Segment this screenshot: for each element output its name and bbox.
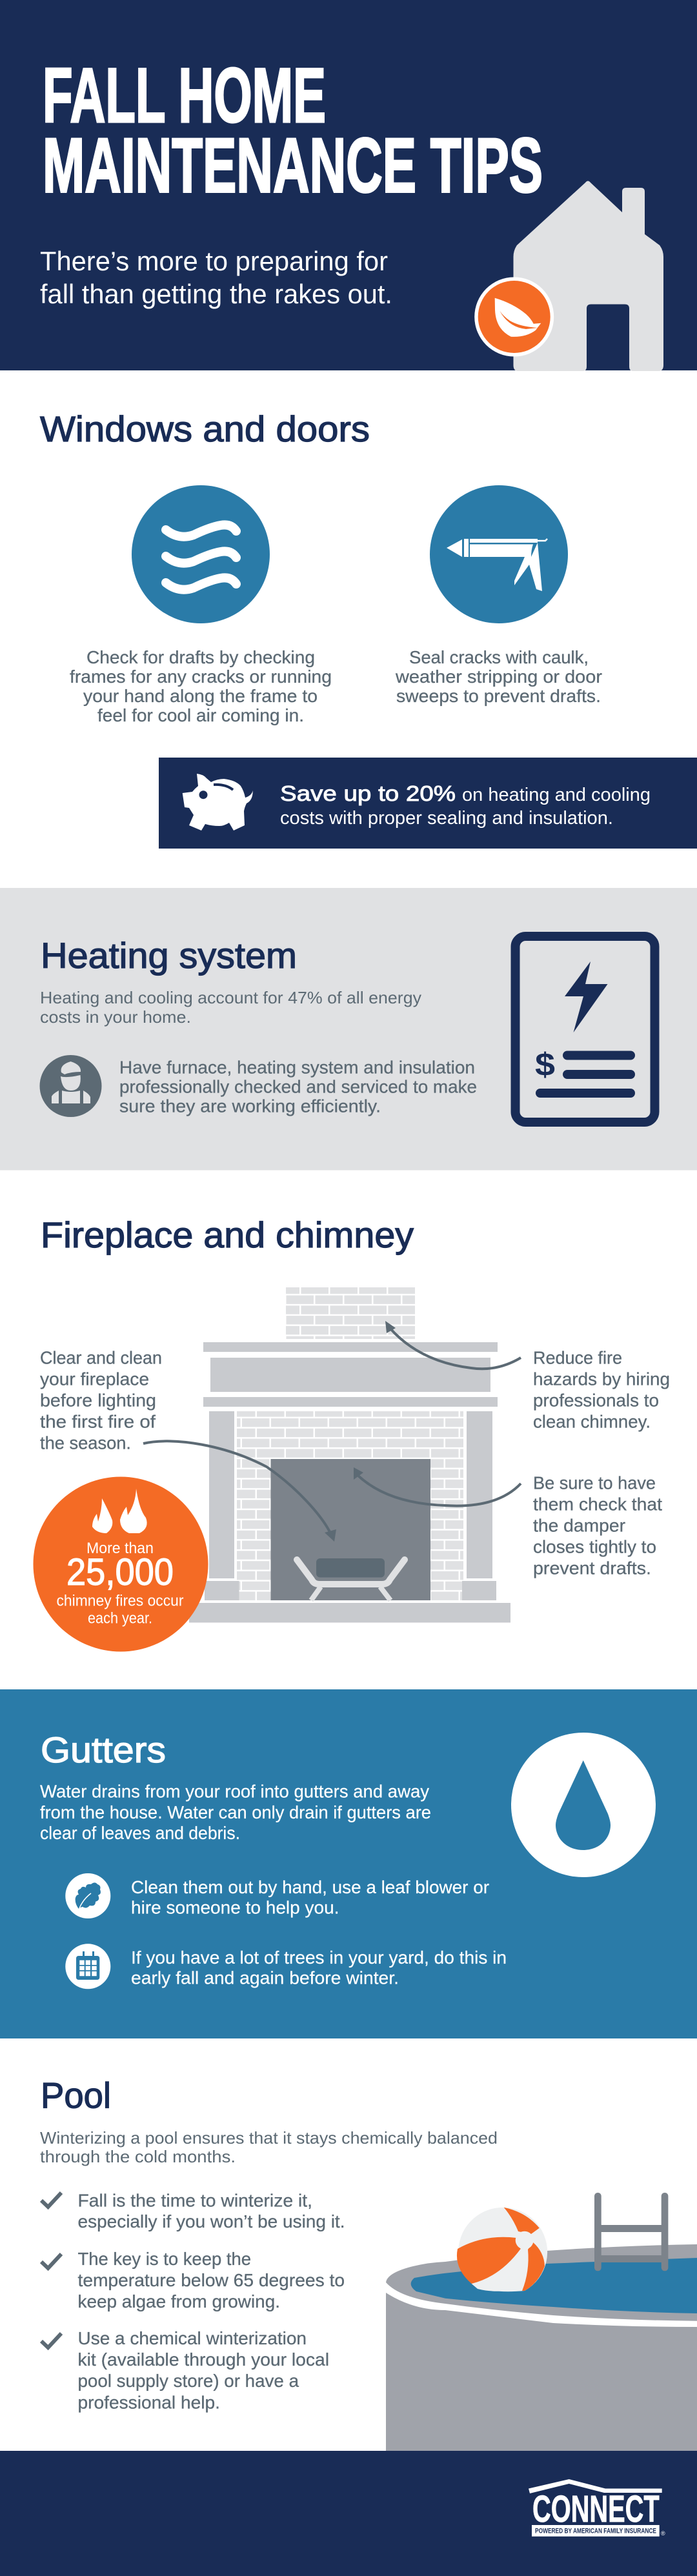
text: chemical kit: pool supply store) or have a bbox=[77, 2371, 299, 2391]
text: winterizing intro: through the cold months. bbox=[40, 2147, 236, 2166]
text: lots of trees: early fall and again before winter. bbox=[131, 1968, 399, 1987]
icon: piggy bank bbox=[183, 774, 253, 830]
icon: water drop bbox=[511, 1733, 656, 1877]
text: damper check bbox=[533, 1473, 662, 1578]
text: reduce fire hazards: Reduce fire bbox=[533, 1347, 622, 1368]
text: check for drafts: frames for any cracks or running bbox=[70, 667, 332, 687]
icon: check 2 bbox=[41, 2254, 61, 2268]
text: chemical kit bbox=[77, 2328, 329, 2412]
text: damper check: the damper bbox=[533, 1515, 625, 1536]
text: clear and clean bbox=[40, 1347, 162, 1453]
text: fall is the time: Fall is the time to winterize it, bbox=[77, 2190, 312, 2211]
icon: flames bbox=[92, 1489, 147, 1533]
subtitle: fall than getting the rakes out. bbox=[40, 279, 392, 309]
text: savings: on heating and cooling bbox=[462, 785, 651, 805]
text: clear and clean: your fireplace bbox=[40, 1369, 149, 1389]
icon: beach ball bbox=[457, 2208, 547, 2291]
text: damper check: prevent drafts. bbox=[533, 1558, 651, 1578]
text: savings: costs with proper sealing and insulation. bbox=[280, 808, 613, 829]
text: damper check: Be sure to have bbox=[533, 1473, 656, 1493]
text: more than 25,000: 25,000 bbox=[66, 1551, 174, 1593]
text: water drains bbox=[40, 1781, 431, 1843]
text: savings bbox=[280, 781, 651, 829]
text: winterizing intro: Winterizing a pool ensures that it stays chemically balanced bbox=[40, 2128, 498, 2148]
logo: connect bbox=[529, 2479, 665, 2537]
icon: energy bill bbox=[515, 936, 654, 1122]
icon: oak leaf bbox=[65, 1873, 110, 1918]
icon: ladder bbox=[594, 2193, 668, 2271]
heading: fireplace and chimney: Fireplace and chimney bbox=[41, 1214, 414, 1255]
text: keep the temperature bbox=[77, 2249, 345, 2311]
text: clean them out: hire someone to help you. bbox=[131, 1897, 339, 1918]
text: chemical kit: kit (available through your local bbox=[77, 2350, 329, 2370]
icon: technician bbox=[40, 1055, 102, 1117]
text: keep the temperature: The key is to keep the bbox=[77, 2249, 251, 2269]
text: chemical kit: professional help. bbox=[77, 2393, 220, 2412]
text: damper check: closes tightly to bbox=[533, 1537, 656, 1556]
icon: caulk gun bbox=[430, 485, 568, 623]
subtitle: There’s more to preparing for bbox=[40, 246, 388, 276]
panel: gutters bbox=[0, 1689, 697, 2038]
text: water drains: Water drains from your roof into gutters and away bbox=[40, 1781, 429, 1802]
text: seal cracks: sweeps to prevent drafts. bbox=[396, 686, 601, 706]
illustration: fireplace bbox=[189, 1287, 510, 1622]
text: check for drafts: feel for cool air coming in. bbox=[97, 705, 304, 725]
text: more than 25,000: More than bbox=[86, 1540, 154, 1557]
text: clear and clean: the first fire of bbox=[40, 1412, 156, 1431]
text: reduce fire hazards: clean chimney. bbox=[533, 1412, 651, 1431]
arrow: to chimney bbox=[385, 1321, 521, 1369]
text: check for drafts bbox=[70, 647, 332, 725]
text: clear and clean: before lighting bbox=[40, 1390, 156, 1411]
panel: pool bbox=[40, 2075, 697, 2451]
text: water drains: from the house. Water can only drain if gutters are bbox=[40, 1802, 431, 1822]
logo: connect: POWERED BY AMERICAN FAMILY INSURANCE bbox=[535, 2527, 656, 2535]
text: fall is the time: especially if you won’t be using it. bbox=[77, 2211, 345, 2231]
text: clear and clean: the season. bbox=[40, 1433, 131, 1453]
text: seal cracks: weather stripping or door bbox=[395, 667, 602, 687]
text: check for drafts: Check for drafts by checking bbox=[86, 647, 315, 667]
text: reduce fire hazards bbox=[533, 1347, 670, 1431]
arrow: to firebox bbox=[143, 1441, 336, 1542]
text: keep the temperature: keep algae from growing. bbox=[77, 2291, 280, 2311]
text: seal cracks: Seal cracks with caulk, bbox=[409, 647, 589, 667]
text: check for drafts: your hand along the frame to bbox=[83, 686, 318, 706]
text: more than 25,000: each year. bbox=[88, 1609, 152, 1627]
heading: windows and doors: Windows and doors bbox=[40, 408, 370, 449]
callout: save up to 20% bbox=[159, 758, 697, 849]
icon: house bbox=[514, 181, 663, 371]
text: clean them out bbox=[131, 1877, 489, 1918]
text: more than 25,000 bbox=[57, 1540, 183, 1627]
icon: check 1 bbox=[41, 2193, 61, 2207]
icon: air drafts bbox=[132, 485, 270, 623]
text: reduce fire hazards: professionals to bbox=[533, 1390, 659, 1411]
text: fall is the time bbox=[77, 2190, 345, 2231]
text: furnace check: sure they are working efficiently. bbox=[119, 1096, 381, 1116]
panel: footer bbox=[0, 2451, 697, 2576]
heading: gutters: Gutters bbox=[41, 1729, 166, 1770]
callout: chimney fires bbox=[34, 1476, 208, 1652]
logo: connect: ® bbox=[661, 2530, 665, 2537]
icon: check 3 bbox=[41, 2333, 61, 2348]
text: energy costs: costs in your home. bbox=[40, 1007, 191, 1027]
text: savings: Save up to 20% bbox=[280, 781, 456, 805]
title: FALL HOME bbox=[43, 52, 326, 139]
icon: energy bill: $ bbox=[535, 1047, 555, 1083]
text: reduce fire hazards: hazards by hiring bbox=[533, 1369, 670, 1389]
text: winterizing intro bbox=[40, 2128, 498, 2166]
icon: calendar bbox=[65, 1944, 110, 1989]
text: damper check: them check that bbox=[533, 1494, 662, 1514]
text: furnace check bbox=[119, 1057, 477, 1116]
text: keep the temperature: temperature below 65 degrees to bbox=[77, 2270, 345, 2290]
text: lots of trees: If you have a lot of trees in your yard, do this in bbox=[131, 1947, 507, 1967]
illustration: pool bbox=[386, 2193, 697, 2451]
title bbox=[43, 52, 543, 209]
text: furnace check: Have furnace, heating system and insulation bbox=[119, 1057, 475, 1078]
arrow: to damper bbox=[354, 1467, 521, 1506]
panel: windows and doors bbox=[40, 408, 697, 849]
heading: pool: Pool bbox=[41, 2075, 111, 2115]
panel: header bbox=[0, 0, 697, 371]
text: more than 25,000: chimney fires occur bbox=[57, 1593, 183, 1609]
text: chemical kit: Use a chemical winterization bbox=[77, 2328, 307, 2348]
text: water drains: clear of leaves and debris. bbox=[40, 1823, 240, 1843]
text: lots of trees bbox=[131, 1947, 507, 1987]
text: clean them out: Clean them out by hand, use a leaf blower or bbox=[131, 1877, 489, 1897]
text: seal cracks bbox=[395, 647, 602, 706]
subtitle bbox=[40, 246, 392, 309]
panel: heating system bbox=[0, 888, 697, 1171]
text: furnace check: professionally checked and serviced to make bbox=[119, 1076, 477, 1097]
text: energy costs bbox=[40, 988, 421, 1027]
text: energy costs: Heating and cooling account for 47% of all energy bbox=[40, 988, 421, 1007]
icon: leaf badge bbox=[474, 277, 554, 356]
heading: heating system: Heating system bbox=[41, 935, 297, 976]
panel: fireplace and chimney bbox=[34, 1214, 670, 1652]
text: clear and clean: Clear and clean bbox=[40, 1347, 162, 1368]
